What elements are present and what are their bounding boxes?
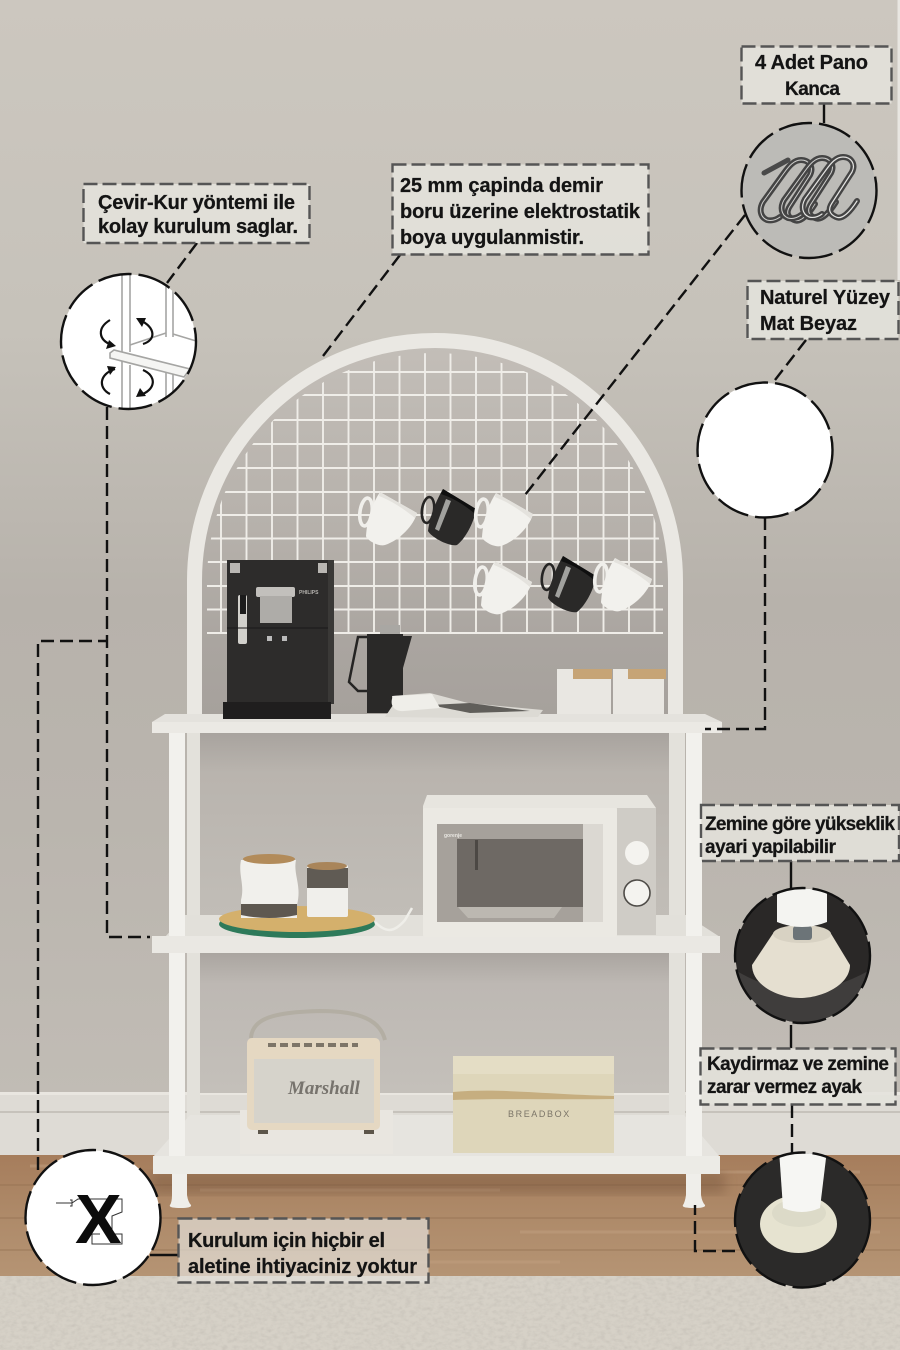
callout: non-slip foot: [700, 1048, 896, 1104]
coffee machine: [223, 560, 334, 719]
icon: no drill needed: X: [75, 1180, 122, 1258]
bread box: [453, 1056, 614, 1153]
radio: Marshall: [287, 1078, 361, 1099]
wood floor: [0, 1155, 900, 1277]
shelf unit: [152, 340, 722, 1208]
magazine: [385, 693, 543, 718]
lower compartment: [187, 953, 685, 1093]
callout: tube and coating: [392, 164, 648, 254]
callout: no tools: Kurulum için hiçbir el: [188, 1230, 385, 1252]
icon: no drill needed: [26, 1150, 160, 1285]
callout: height adjustment: ayari yapilabilir: [705, 837, 837, 858]
middle shelf top surface: [165, 915, 720, 937]
callout: surface: Naturel Yüzey: [760, 287, 891, 309]
coffee machine: PHILIPS: [299, 590, 319, 596]
icon: white surface swatch: [698, 382, 832, 518]
callout: easy assembly: Çevir-Kur yöntemi ile: [98, 192, 295, 214]
carpet: [0, 1276, 900, 1350]
bottom shelf top surface: [153, 1115, 720, 1157]
middle shelf front: [152, 936, 720, 953]
callout: tube and coating: 25 mm çapinda demir: [400, 175, 603, 197]
callout: hooks: 4 Adet Pano: [755, 52, 868, 74]
back panel inside the arch: [195, 341, 675, 716]
storage canisters: [557, 669, 666, 714]
bread box: BREADBOX: [508, 1109, 571, 1119]
icon: adjustable foot: [735, 885, 870, 1025]
wall between shelves: [187, 733, 685, 915]
right edge strip: [898, 0, 900, 280]
microwave: gorenje: [444, 833, 462, 839]
arch tube: [194, 340, 676, 716]
callout: height adjustment: Zemine göre yükseklik: [705, 814, 895, 835]
leader lines: [38, 104, 824, 1255]
baseboard: [0, 1092, 900, 1157]
back legs: [187, 733, 685, 1118]
callout: no tools: [178, 1218, 428, 1282]
callout: tube and coating: boru üzerine elektrostatik: [400, 201, 641, 223]
callout: easy assembly: kolay kurulum saglar.: [98, 216, 298, 238]
icon: hooks circle: [742, 123, 876, 258]
callout: hooks: [742, 46, 892, 104]
callout: non-slip foot: zarar vermez ayak: [707, 1077, 862, 1098]
top shelf: [152, 714, 722, 733]
radio: [240, 1011, 393, 1154]
feet: [170, 1174, 705, 1208]
callout: hooks: Kanca: [785, 79, 840, 100]
callout: easy assembly: [84, 184, 310, 243]
callout: tube and coating: boya uygulanmistir.: [400, 227, 584, 249]
icon: floor foot: [735, 1150, 870, 1288]
bottom shelf front: [153, 1156, 720, 1174]
callout: height adjustment: [701, 805, 899, 861]
tray with jars: [219, 854, 412, 938]
icon: assembly detail circle: [61, 270, 196, 410]
hanging mugs: [358, 489, 652, 614]
microwave: [423, 795, 656, 937]
callout: non-slip foot: Kaydirmaz ve zemine: [707, 1054, 889, 1075]
front legs: [169, 733, 702, 1157]
mesh grid: [207, 353, 663, 634]
callout: surface: [748, 281, 898, 339]
french press: [349, 625, 412, 713]
callout: no tools: aletine ihtiyaciniz yoktur: [188, 1256, 417, 1278]
callout: surface: Mat Beyaz: [760, 313, 857, 335]
